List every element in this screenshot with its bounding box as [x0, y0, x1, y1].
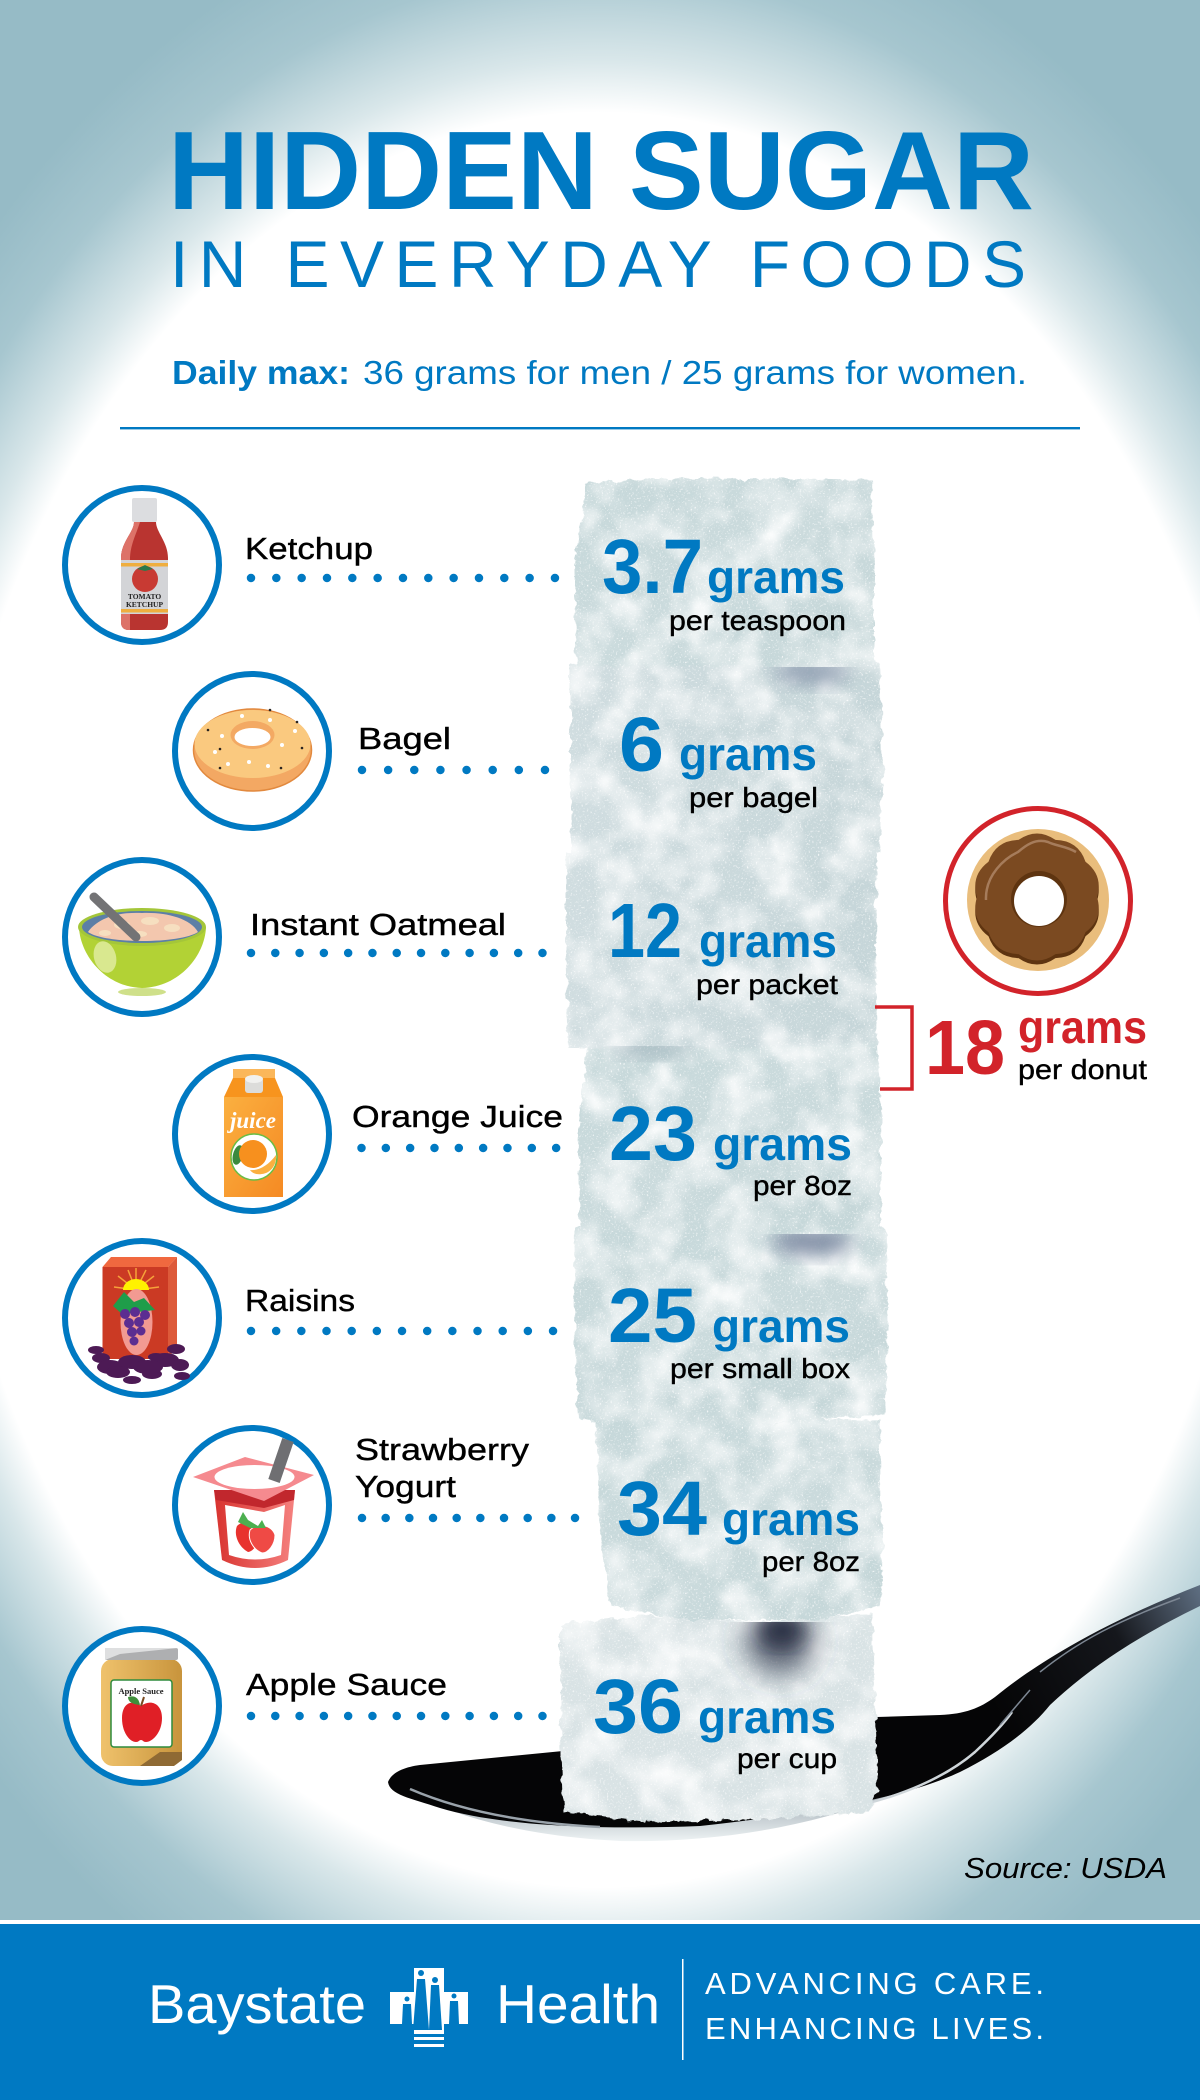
dotted leader [251, 949, 542, 957]
row: strawberry yogurt [175, 1428, 860, 1582]
icon: ketchup bottle [65, 488, 219, 642]
label: strawberry yogurt: Strawberry [355, 1432, 530, 1467]
sugar cube 6 [597, 1418, 882, 1620]
dotted leader [362, 766, 546, 774]
value: 36 grams [593, 1664, 837, 1774]
row: instant oatmeal [65, 860, 838, 1014]
icon: apple sauce jar: Apple Sauce [118, 1686, 164, 1696]
value: 18 grams: 18 [925, 1005, 1005, 1091]
value: 18 grams: per donut [1018, 1054, 1147, 1085]
value: 36 grams: 36 [593, 1664, 683, 1750]
value: 36 grams: per cup [737, 1743, 837, 1774]
value: 25 grams [608, 1273, 850, 1384]
label: bagel: Bagel [358, 721, 451, 756]
tagline: ENHANCING LIVES. [705, 2011, 1044, 2046]
value: 18 grams [925, 1001, 1147, 1091]
sugar cube 1 [574, 478, 874, 666]
value: 25 grams: 25 [608, 1273, 697, 1359]
value: 18 grams: grams [1018, 1001, 1147, 1053]
daily max statement: Daily max: [172, 354, 350, 391]
sugar cube 7 [560, 1614, 878, 1822]
label: strawberry yogurt: Yogurt [355, 1469, 456, 1504]
footer rule [0, 1920, 1200, 1924]
label: orange juice: Orange Juice [352, 1099, 563, 1134]
value: 34 grams: 34 [617, 1466, 707, 1552]
daily max statement: 36 grams for men / 25 grams for women. [363, 354, 1027, 391]
row: bagel [175, 674, 818, 828]
icon: juice carton [175, 1057, 329, 1211]
value: 12 grams: per packet [696, 969, 838, 1000]
value: 25 grams: grams [712, 1300, 850, 1352]
heading: hidden sugar: HIDDEN SUGAR [168, 109, 1034, 233]
value: 6 grams: grams [679, 728, 817, 780]
dotted leader [362, 1514, 576, 1522]
value: 23 grams: per 8oz [753, 1170, 852, 1201]
value: 12 grams [608, 888, 838, 1000]
icon: juice carton: juice [226, 1108, 276, 1133]
label: raisins: Raisins [245, 1283, 355, 1318]
label: strawberry yogurt [355, 1432, 530, 1504]
icon: oatmeal bowl [65, 860, 219, 1014]
label: apple sauce: Apple Sauce [246, 1667, 447, 1702]
callout: donut comparison [875, 808, 1147, 1091]
value: 23 grams: 23 [609, 1091, 697, 1177]
value: 3.7 grams [602, 524, 846, 636]
logo wordmark: baystate: Baystate [148, 1973, 366, 2035]
label: ketchup: Ketchup [245, 531, 373, 566]
value: 34 grams [617, 1466, 860, 1577]
icon: yogurt cup [175, 1428, 329, 1582]
value: 3.7 grams: grams [707, 551, 845, 603]
value: 23 grams [609, 1091, 852, 1201]
value: 3.7 grams: per teaspoon [669, 605, 846, 636]
icon: ketchup bottle: KETCHUP [126, 600, 163, 609]
value: 6 grams [619, 702, 818, 813]
value: 25 grams: per small box [670, 1353, 850, 1384]
value: 36 grams: grams [698, 1691, 836, 1743]
row: ketchup [65, 488, 846, 642]
sugar cube 5 [574, 1226, 888, 1424]
source note: Source: USDA [964, 1853, 1167, 1885]
spoon [388, 1585, 1200, 1841]
dotted leader [362, 1144, 556, 1152]
row: apple sauce [65, 1629, 837, 1783]
bracket [875, 1007, 912, 1089]
dotted leader [251, 1712, 542, 1720]
dotted leader [251, 1327, 554, 1335]
subheading: in everyday foods: IN EVERYDAY FOODS [170, 227, 1026, 301]
icon: apple sauce jar [65, 1629, 219, 1783]
footer band [0, 1924, 1200, 2100]
value: 3.7 grams: 3.7 [602, 524, 703, 610]
icon: raisin box [65, 1241, 219, 1395]
icon: bagel [175, 674, 329, 828]
cube shadows [610, 660, 852, 1672]
title block [168, 109, 1034, 301]
value: 6 grams: per bagel [689, 782, 818, 813]
icon: ketchup bottle: TOMATO [128, 592, 161, 601]
icon: chocolate donut [946, 808, 1130, 994]
value: 12 grams: 12 [608, 888, 682, 974]
header rule [120, 427, 1080, 429]
sugar cube 3 [566, 848, 877, 1048]
label: instant oatmeal: Instant Oatmeal [250, 907, 506, 942]
logo icon: family cross [390, 1968, 468, 2047]
value: 34 grams: grams [722, 1493, 860, 1545]
footer divider [682, 1959, 684, 2060]
value: 23 grams: grams [713, 1118, 852, 1170]
row: orange juice [175, 1057, 852, 1211]
value: 6 grams: 6 [619, 702, 664, 788]
sugar cube 2 [570, 660, 883, 854]
logo wordmark: health: Health [496, 1973, 660, 2035]
tagline [705, 1966, 1044, 2046]
sugar cube 4 [578, 1040, 881, 1232]
dotted leader [251, 574, 556, 582]
sugar cube stack [560, 478, 888, 1822]
value: 12 grams: grams [699, 915, 837, 967]
row: raisins [65, 1241, 850, 1395]
value: 34 grams: per 8oz [762, 1546, 860, 1577]
tagline: ADVANCING CARE. [705, 1966, 1044, 2001]
